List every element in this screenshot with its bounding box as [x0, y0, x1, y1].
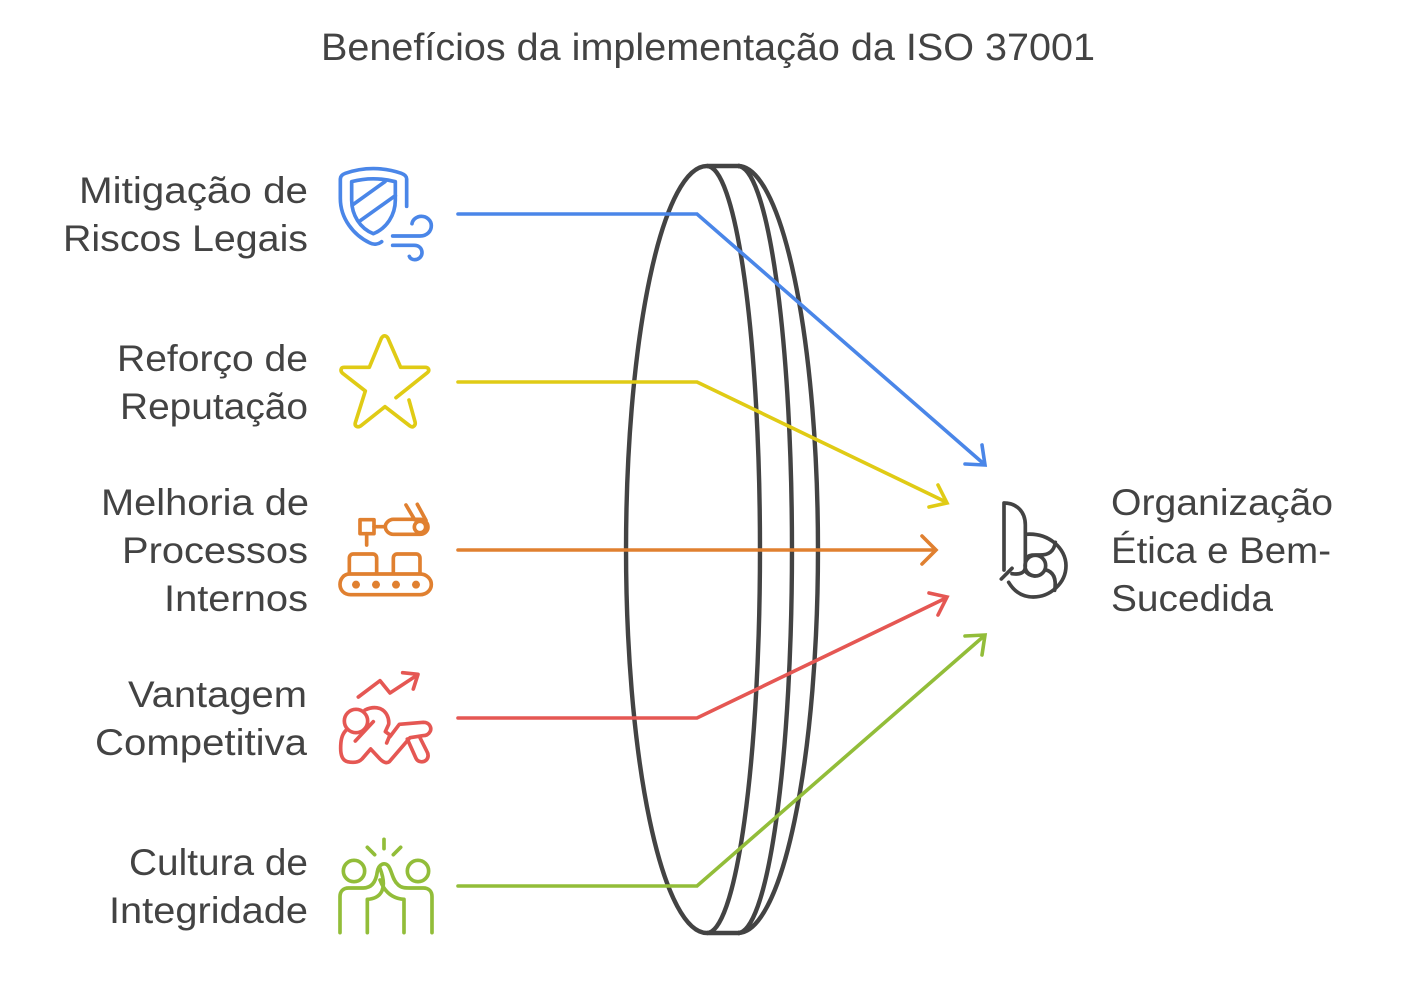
label: Organização Ética e Bem-Sucedida	[1111, 482, 1333, 619]
label: Vantagem Competitiva: Competitiva	[95, 722, 307, 763]
title: Benefícios da implementação da ISO 37001	[321, 27, 1095, 69]
label: Melhoria de Processos Internos	[101, 482, 309, 619]
lens shape	[626, 166, 818, 933]
label: Vantagem Competitiva: Vantagem	[128, 674, 307, 715]
icon: organization emblem	[1001, 503, 1066, 597]
icon: shield with wind	[340, 169, 431, 260]
label: Vantagem Competitiva	[95, 674, 307, 763]
arrow: Melhoria de Processos Internos	[458, 536, 936, 564]
icon: high five	[340, 839, 432, 933]
label: Cultura de Integridade: Integridade	[109, 890, 308, 931]
label: Organização Ética e Bem-Sucedida: Organização	[1111, 482, 1333, 523]
label: Reforço de Reputação	[117, 338, 308, 427]
arrow: Reforço de Reputação	[458, 382, 947, 507]
label: Reforço de Reputação: Reforço de	[117, 338, 308, 379]
icon: robotic arm and conveyor	[340, 504, 431, 595]
label: Melhoria de Processos Internos: Processos	[122, 530, 308, 571]
arrow: Mitigação de Riscos Legais	[458, 214, 985, 465]
label: Organização Ética e Bem-Sucedida: Sucedida	[1111, 578, 1273, 619]
icon: rising arrow and reclining figure	[341, 673, 431, 763]
label: Melhoria de Processos Internos: Internos	[164, 578, 308, 619]
label: Cultura de Integridade: Cultura de	[129, 842, 308, 883]
label: Organização Ética e Bem-Sucedida: Ética e Bem-	[1111, 530, 1331, 571]
label: Reforço de Reputação: Reputação	[120, 386, 308, 427]
label: Mitigação de Riscos Legais: Mitigação de	[79, 170, 308, 211]
label: Mitigação de Riscos Legais: Riscos Legais	[63, 218, 308, 259]
arrow: Cultura de Integridade	[458, 635, 985, 886]
icon: star	[341, 336, 429, 427]
arrow: Vantagem Competitiva	[458, 593, 947, 718]
label: Mitigação de Riscos Legais	[63, 170, 308, 259]
label: Cultura de Integridade	[109, 842, 308, 931]
label: Melhoria de Processos Internos: Melhoria de	[101, 482, 309, 523]
